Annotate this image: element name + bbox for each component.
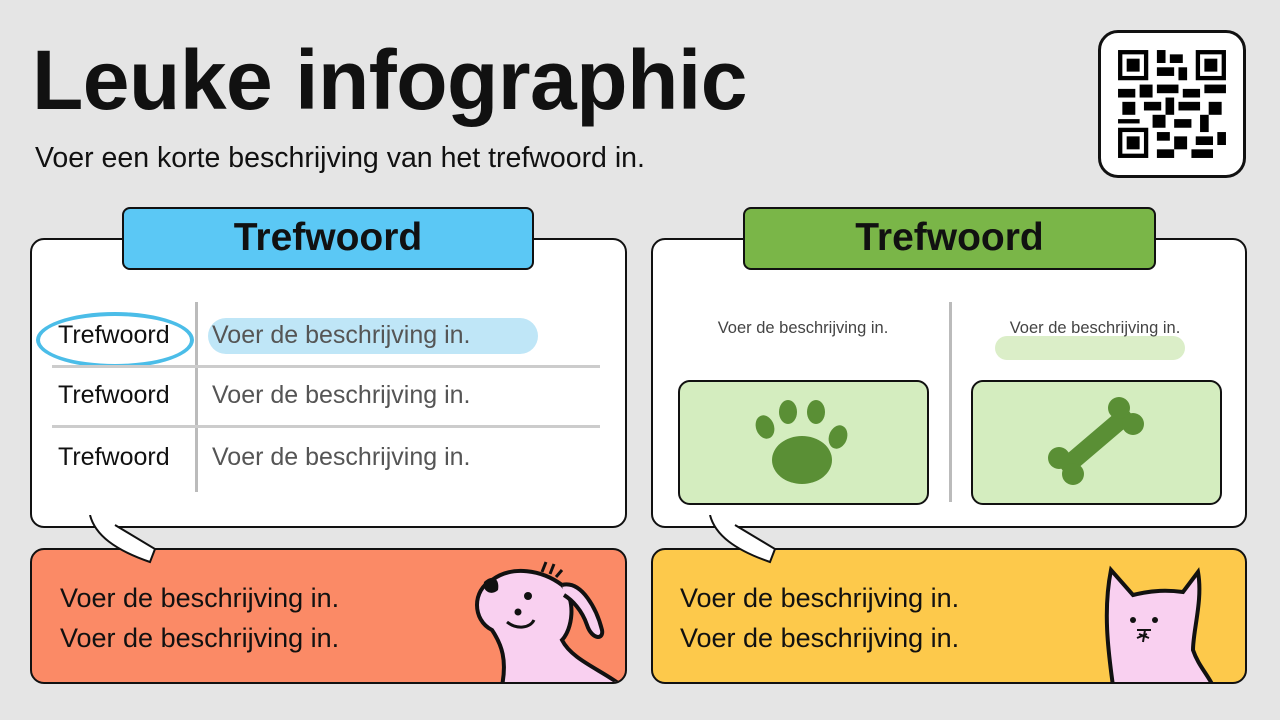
- callout: yellow: Voer de beschrijving in.: [680, 583, 959, 613]
- heading tab left: [122, 207, 534, 270]
- panel: right card: Voer de beschrijving in.: [1010, 319, 1180, 337]
- panel: left card: [30, 238, 627, 528]
- panel: right card: [651, 238, 1247, 528]
- highlight stroke: [995, 336, 1185, 360]
- heading tab right: [743, 207, 1156, 270]
- callout: orange: Voer de beschrijving in.: [60, 583, 339, 613]
- callout tail left: [89, 515, 156, 564]
- icon box: paw: [678, 380, 929, 505]
- icon: cat: [1104, 566, 1214, 682]
- QR code: [1098, 30, 1246, 178]
- icon box: bone: [971, 380, 1222, 505]
- callout: yellow: [651, 548, 1247, 684]
- panel: left card: Voer de beschrijving in.: [212, 443, 470, 471]
- highlight stroke: [208, 318, 538, 354]
- descriptions: Voer de beschrijving in.: [718, 319, 888, 337]
- subtitle: Voer een korte beschrijving van het trefwoord in.: [35, 142, 645, 174]
- row labels: Trefwoord: [58, 321, 170, 349]
- callout: yellow: Voer de beschrijving in.: [680, 623, 959, 653]
- icon: dog: [475, 562, 618, 682]
- callout tail right: [709, 515, 776, 564]
- row descriptions: Voer de beschrijving in.: [212, 321, 470, 349]
- panel: left card: Trefwoord: [58, 381, 170, 409]
- highlight ellipse: [36, 312, 194, 368]
- heading tab right: Trefwoord: [855, 216, 1044, 259]
- callout: orange: Voer de beschrijving in.: [60, 623, 339, 653]
- title: Leuke infographic: [32, 33, 747, 127]
- panel: left card: Voer de beschrijving in.: [212, 381, 470, 409]
- callout: orange: [30, 548, 627, 684]
- heading tab left: Trefwoord: [234, 216, 422, 259]
- panel: left card: Trefwoord: [58, 443, 170, 471]
